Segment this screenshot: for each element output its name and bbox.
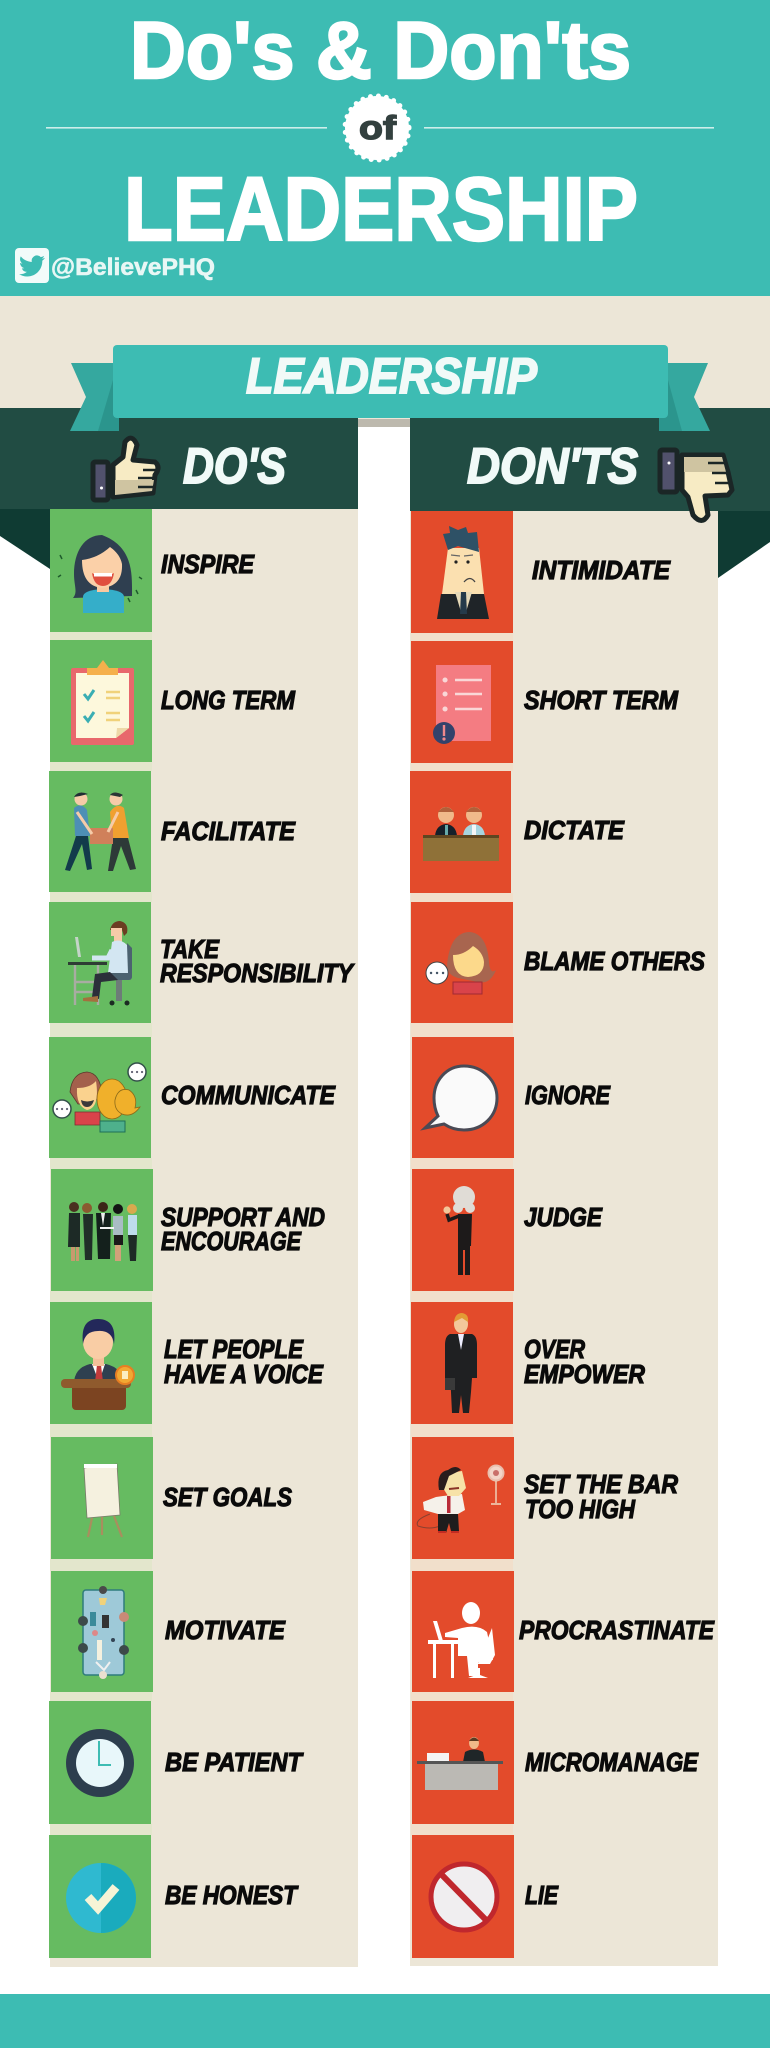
- don't row: intimidate: INTIMIDATE: [532, 555, 671, 585]
- do row: let people have a voice: LET PEOPLE: [164, 1334, 304, 1364]
- don't row: blame others: [411, 902, 706, 1023]
- icon: two men with box: [65, 792, 136, 871]
- do row: support and encourage: ENCOURAGE: [161, 1226, 302, 1256]
- don't row: micromanage: [412, 1701, 699, 1824]
- icon: group of people: [68, 1202, 137, 1261]
- don't row: procrastinate: [412, 1571, 715, 1692]
- do row: long term: [50, 640, 296, 762]
- ribbon: leadership: [70, 345, 710, 431]
- icon: thumbs down: [660, 450, 732, 520]
- header banner: [0, 0, 770, 296]
- icon: businessman: [445, 1313, 477, 1413]
- header band: do's: DO'S: [183, 438, 286, 494]
- don't row: judge: JUDGE: [524, 1202, 603, 1232]
- icon: stressed man and target: [417, 1466, 504, 1533]
- do row: set goals: [51, 1437, 293, 1559]
- do row: motivate: [51, 1571, 286, 1692]
- don't row: over empower: OVER: [524, 1334, 585, 1364]
- do row: communicate: [49, 1037, 336, 1158]
- do row: facilitate: [49, 771, 296, 892]
- icon: two women talking: [53, 1063, 146, 1132]
- icon: man at desk: [68, 921, 132, 1006]
- do row: take responsibility: RESPONSIBILITY: [160, 958, 355, 988]
- header band: do's: [0, 408, 358, 509]
- don't row: judge: [412, 1169, 603, 1291]
- do row: facilitate: FACILITATE: [161, 816, 296, 846]
- badge: of: [345, 96, 409, 160]
- icon: short list: [433, 665, 491, 744]
- do row: long term: LONG TERM: [161, 685, 296, 715]
- icon: two men at table: [423, 807, 499, 861]
- do row: inspire: INSPIRE: [161, 549, 255, 579]
- do row: be honest: [49, 1835, 299, 1958]
- icon: silhouette at desk: [428, 1602, 495, 1678]
- do row: communicate: COMMUNICATE: [161, 1080, 336, 1110]
- icon: prohibition sign: [431, 1864, 497, 1930]
- do row: support and encourage: [51, 1169, 325, 1291]
- title: Do's & Don'ts: Do's & Don'ts: [130, 6, 631, 96]
- don't row: ignore: IGNORE: [525, 1080, 611, 1110]
- footer bar: [0, 1994, 770, 2048]
- do row: motivate: MOTIVATE: [165, 1615, 286, 1645]
- panel: do's background: [50, 509, 358, 1967]
- don't row: intimidate: [411, 511, 671, 633]
- don't row: over empower: [411, 1302, 645, 1424]
- icon: empty speech bubble: [425, 1066, 497, 1130]
- right fold: [718, 511, 770, 578]
- icon: judge in wig: [443, 1186, 475, 1275]
- center white gap: [358, 419, 410, 2019]
- left fold: [0, 509, 50, 569]
- don't row: short term: [411, 641, 679, 763]
- don't row: dictate: DICTATE: [524, 815, 625, 845]
- don't row: over empower: EMPOWER: [524, 1359, 645, 1389]
- do row: be honest: BE HONEST: [165, 1880, 299, 1910]
- icon: woman with speech bubble: [426, 932, 496, 994]
- don't row: lie: [412, 1835, 559, 1958]
- do row: take responsibility: TAKE: [160, 934, 220, 964]
- do row: inspire: [50, 509, 255, 632]
- twitter handle: [15, 248, 215, 283]
- don't row: set the bar too high: [412, 1437, 678, 1559]
- twitter handle: @BelievePHQ: [51, 254, 215, 281]
- icon: thumbs up: [93, 438, 158, 500]
- icon: woman: [58, 535, 142, 613]
- don't row: lie: LIE: [525, 1880, 559, 1910]
- icon: clock: [66, 1729, 134, 1797]
- do row: set goals: SET GOALS: [163, 1482, 293, 1512]
- don't row: set the bar too high: TOO HIGH: [525, 1494, 636, 1524]
- don't row: short term: SHORT TERM: [524, 685, 679, 715]
- badge: of: of: [359, 109, 397, 146]
- icon: man at office desk: [417, 1737, 503, 1790]
- panel: don'ts background: [410, 511, 718, 1966]
- icon: meeting table: [78, 1586, 129, 1679]
- don't row: micromanage: MICROMANAGE: [525, 1747, 699, 1777]
- header band: don'ts: DON'TS: [467, 438, 638, 494]
- don't row: ignore: [412, 1037, 611, 1158]
- don't row: procrastinate: PROCRASTINATE: [519, 1615, 715, 1645]
- do row: support and encourage: SUPPORT AND: [161, 1202, 325, 1232]
- icon: clipboard: [71, 660, 134, 745]
- do row: let people have a voice: HAVE A VOICE: [164, 1359, 324, 1389]
- do row: let people have a voice: [50, 1302, 324, 1424]
- do row: be patient: [49, 1701, 304, 1824]
- header band: don'ts: [410, 408, 770, 511]
- icon: speaker at podium: [61, 1319, 134, 1410]
- icon: check badge: [66, 1863, 136, 1933]
- ribbon: leadership: LEADERSHIP: [246, 348, 538, 404]
- title: LEADERSHIP: LEADERSHIP: [124, 160, 638, 260]
- don't row: dictate: [410, 771, 625, 893]
- icon: angry boss: [437, 526, 489, 619]
- do row: be patient: BE PATIENT: [165, 1747, 304, 1777]
- icon: flipchart: [84, 1464, 122, 1537]
- beige backdrop: [0, 296, 770, 421]
- don't row: set the bar too high: SET THE BAR: [524, 1469, 678, 1499]
- do row: take responsibility: [49, 902, 355, 1023]
- don't row: blame others: BLAME OTHERS: [524, 946, 706, 976]
